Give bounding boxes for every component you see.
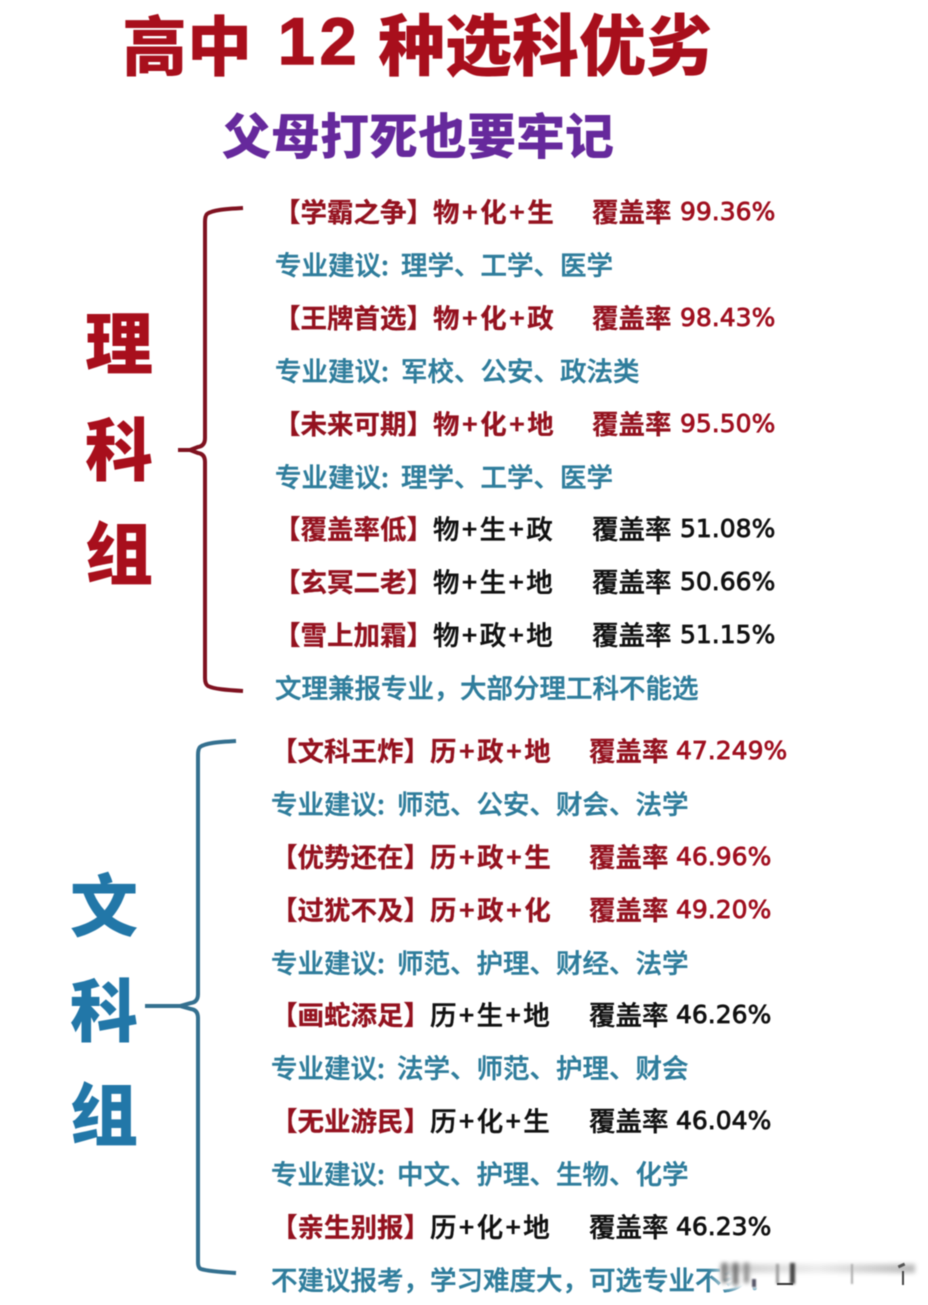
arts row 5: 历+化+生 — [430, 1100, 552, 1139]
arts advice 2: 专业建议: — [271, 942, 385, 981]
arts row 1: 47.249% — [676, 736, 787, 765]
title — [122, 0, 713, 90]
science row 3 — [274, 403, 776, 442]
title: 12 — [278, 4, 361, 78]
arts note: 可选专业不多！ — [589, 1259, 774, 1298]
science group label: 科 — [85, 396, 153, 495]
arts row 1: 【文科王炸】 — [271, 730, 430, 769]
science advice 2: 军校、公安、政法类 — [401, 350, 640, 389]
science group label: 理 — [85, 290, 153, 389]
science row 2: 98.43% — [680, 303, 775, 332]
arts advice 1: 师范、公安、财会、法学 — [397, 783, 688, 822]
science row 1: 物+化+生 — [433, 191, 556, 230]
arts advice 1 — [271, 783, 688, 822]
arts row 4 — [271, 994, 772, 1033]
arts advice 3: 专业建议: — [271, 1047, 385, 1086]
arts row 4: 【画蛇添足】 — [271, 994, 430, 1033]
science row 3: 覆盖率 — [592, 403, 672, 442]
arts advice 2 — [271, 942, 688, 981]
arts row 6 — [271, 1206, 772, 1245]
arts note: 学习难度大， — [430, 1259, 589, 1298]
science advice 3 — [275, 456, 613, 495]
arts row 5: 【无业游民】 — [271, 1100, 430, 1139]
arts group label: 组 — [70, 1061, 138, 1160]
arts row 1 — [271, 730, 787, 769]
arts bracket — [144, 738, 237, 1276]
arts advice 4: 专业建议: — [271, 1153, 385, 1192]
arts row 1: 覆盖率 — [589, 730, 668, 769]
arts advice 2: 师范、护理、财经、法学 — [397, 942, 688, 981]
science row 5 — [274, 561, 776, 600]
arts row 6: 【亲生别报】 — [271, 1206, 430, 1245]
blurred watermark — [708, 1260, 918, 1292]
arts row 2: 46.96% — [676, 842, 771, 871]
science row 3: 【未来可期】 — [274, 403, 433, 442]
science row 1 — [274, 191, 776, 230]
science note: 大部分理工科不能选 — [460, 667, 698, 706]
science row 2: 覆盖率 — [592, 297, 672, 336]
science row 6: 【雪上加霜】 — [274, 614, 433, 653]
science row 4: 覆盖率 — [592, 508, 672, 547]
science row 3: 物+化+地 — [433, 403, 556, 442]
arts group label: 科 — [70, 957, 138, 1056]
science row 1: 覆盖率 — [592, 191, 672, 230]
science row 2: 【王牌首选】 — [274, 297, 433, 336]
arts row 4: 46.26% — [676, 1000, 771, 1029]
arts row 3: 【过犹不及】 — [271, 889, 430, 928]
science row 6 — [274, 614, 776, 653]
science note — [275, 667, 698, 706]
arts note — [271, 1259, 774, 1298]
science row 4: 物+生+政 — [433, 508, 555, 547]
science advice 1: 专业建议: — [275, 244, 389, 283]
arts group label: 文 — [70, 852, 138, 951]
arts advice 1: 专业建议: — [271, 783, 385, 822]
arts row 1: 历+政+地 — [430, 730, 553, 769]
science row 5: 50.66% — [680, 567, 775, 596]
science advice 1: 理学、工学、医学 — [401, 244, 613, 283]
science group label — [85, 290, 153, 599]
science row 4: 【覆盖率低】 — [274, 508, 433, 547]
science row 6: 覆盖率 — [592, 614, 672, 653]
science row 2 — [274, 297, 776, 336]
science row 1: 【学霸之争】 — [274, 191, 433, 230]
arts note: 不建议报考， — [271, 1259, 430, 1298]
science row 5: 【玄冥二老】 — [274, 561, 433, 600]
arts advice 3 — [271, 1047, 688, 1086]
science row 6: 51.15% — [680, 620, 775, 649]
subtitle: 父母打死也要牢记 — [222, 98, 614, 169]
science advice 3: 理学、工学、医学 — [401, 456, 613, 495]
arts row 4: 覆盖率 — [589, 994, 668, 1033]
science bracket — [177, 205, 244, 694]
arts row 5 — [271, 1100, 772, 1139]
arts row 2 — [271, 836, 772, 875]
arts row 3: 覆盖率 — [589, 889, 668, 928]
science row 4: 51.08% — [680, 514, 775, 543]
arts group label — [70, 852, 138, 1160]
arts advice 3: 法学、师范、护理、财会 — [397, 1047, 688, 1086]
science advice 1 — [275, 244, 613, 283]
science row 4 — [274, 508, 776, 547]
science row 1: 99.36% — [680, 197, 775, 226]
arts row 4: 历+生+地 — [430, 994, 552, 1033]
science row 2: 物+化+政 — [433, 297, 556, 336]
arts row 2: 覆盖率 — [589, 836, 668, 875]
science advice 2: 专业建议: — [275, 350, 389, 389]
arts row 5: 46.04% — [676, 1106, 771, 1135]
arts row 6: 历+化+地 — [430, 1206, 552, 1245]
science note: 文理兼报专业， — [275, 667, 460, 706]
arts row 6: 覆盖率 — [589, 1206, 668, 1245]
arts row 3: 49.20% — [676, 895, 771, 924]
arts row 6: 46.23% — [676, 1212, 771, 1241]
science advice 2 — [275, 350, 640, 389]
arts row 2: 【优势还在】 — [271, 836, 430, 875]
arts row 3 — [271, 889, 772, 928]
arts advice 4 — [271, 1153, 688, 1192]
arts row 3: 历+政+化 — [430, 889, 553, 928]
arts advice 4: 中文、护理、生物、化学 — [397, 1153, 688, 1192]
science row 6: 物+政+地 — [433, 614, 555, 653]
arts row 5: 覆盖率 — [589, 1100, 668, 1139]
science row 5: 物+生+地 — [433, 561, 555, 600]
science row 5: 覆盖率 — [592, 561, 672, 600]
arts row 2: 历+政+生 — [430, 836, 553, 875]
science row 3: 95.50% — [680, 409, 775, 438]
science group label: 组 — [85, 500, 153, 599]
science advice 3: 专业建议: — [275, 456, 389, 495]
